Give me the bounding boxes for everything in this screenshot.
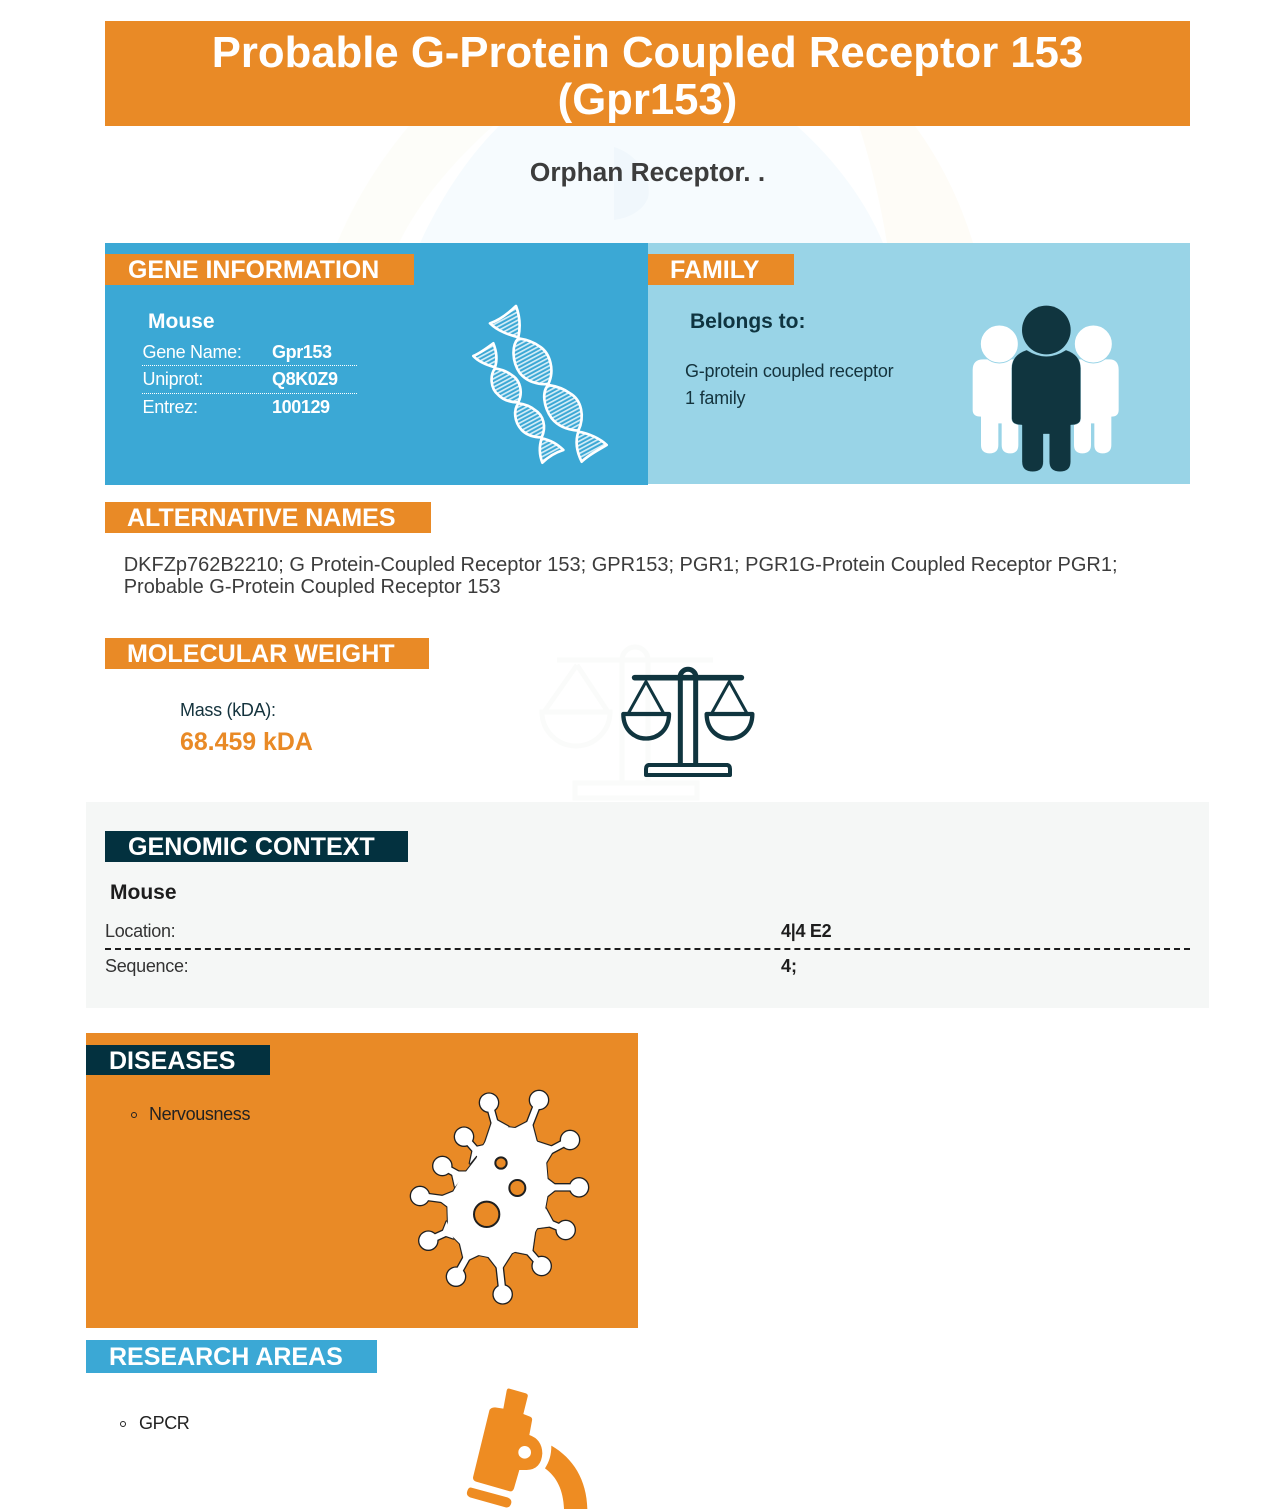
gene data table: Q8K0Z9 <box>272 369 338 389</box>
title banner: Probable G-Protein Coupled Receptor 153 <box>212 28 1083 77</box>
panel: gene information <box>105 243 648 485</box>
panel: family <box>648 243 1190 484</box>
icon: virus <box>410 1090 590 1305</box>
gene data table: Gpr153 <box>272 342 332 362</box>
heading: genomic context: GENOMIC CONTEXT <box>128 833 375 861</box>
location row <box>105 919 1190 950</box>
heading: family: FAMILY <box>670 256 759 284</box>
disease list item: Nervousness <box>149 1104 250 1124</box>
heading: family <box>648 254 794 285</box>
panel: genomic context <box>86 802 1209 1008</box>
sequence row: Sequence: <box>105 956 188 976</box>
heading: gene information: GENE INFORMATION <box>128 256 379 284</box>
location row: Location: <box>105 921 175 941</box>
subtitle: Orphan Receptor. . <box>530 157 765 187</box>
family description: G-protein coupled receptor <box>685 361 893 381</box>
sequence row <box>105 956 797 976</box>
icon: balance scale <box>621 666 754 777</box>
belongs to label: Belongs to: <box>690 310 806 333</box>
heading: alternative names: ALTERNATIVE NAMES <box>127 504 396 532</box>
research area list item: GPCR <box>139 1413 189 1433</box>
alternative names text: DKFZp762B2210; G Protein-Coupled Receptor 153; GPR153; PGR1; PGR1G-Protein Coupled Receptor PGR1; Probable G-Protein Coupled Receptor 153 <box>124 554 1118 598</box>
heading: diseases: DISEASES <box>109 1047 235 1075</box>
title banner <box>105 21 1190 126</box>
sequence row: 4; <box>781 956 797 976</box>
heading: research areas: RESEARCH AREAS <box>109 1343 343 1371</box>
gene data table: Uniprot: <box>142 369 203 389</box>
heading: diseases <box>86 1045 270 1075</box>
mass label: Mass (kDA): <box>180 700 276 720</box>
gene data table: 100129 <box>272 397 330 417</box>
family description: 1 family <box>685 388 745 408</box>
family description <box>685 361 894 408</box>
icon: people group <box>972 306 1119 472</box>
heading: research areas <box>86 1340 377 1373</box>
location row: 4|4 E2 <box>781 921 831 941</box>
panel: diseases <box>86 1033 638 1328</box>
icon: DNA helices <box>472 304 608 464</box>
icon: microscope <box>466 1388 588 1509</box>
title banner: (Gpr153) <box>558 75 737 124</box>
heading: molecular weight: MOLECULAR WEIGHT <box>127 640 395 668</box>
gene data table: Gene Name: <box>142 342 242 362</box>
gene data table <box>142 342 357 417</box>
gene data table: Entrez: <box>142 397 198 417</box>
organism label: Mouse <box>148 310 215 333</box>
mass value: 68.459 kDA <box>180 728 313 756</box>
organism label: Mouse <box>110 881 177 904</box>
